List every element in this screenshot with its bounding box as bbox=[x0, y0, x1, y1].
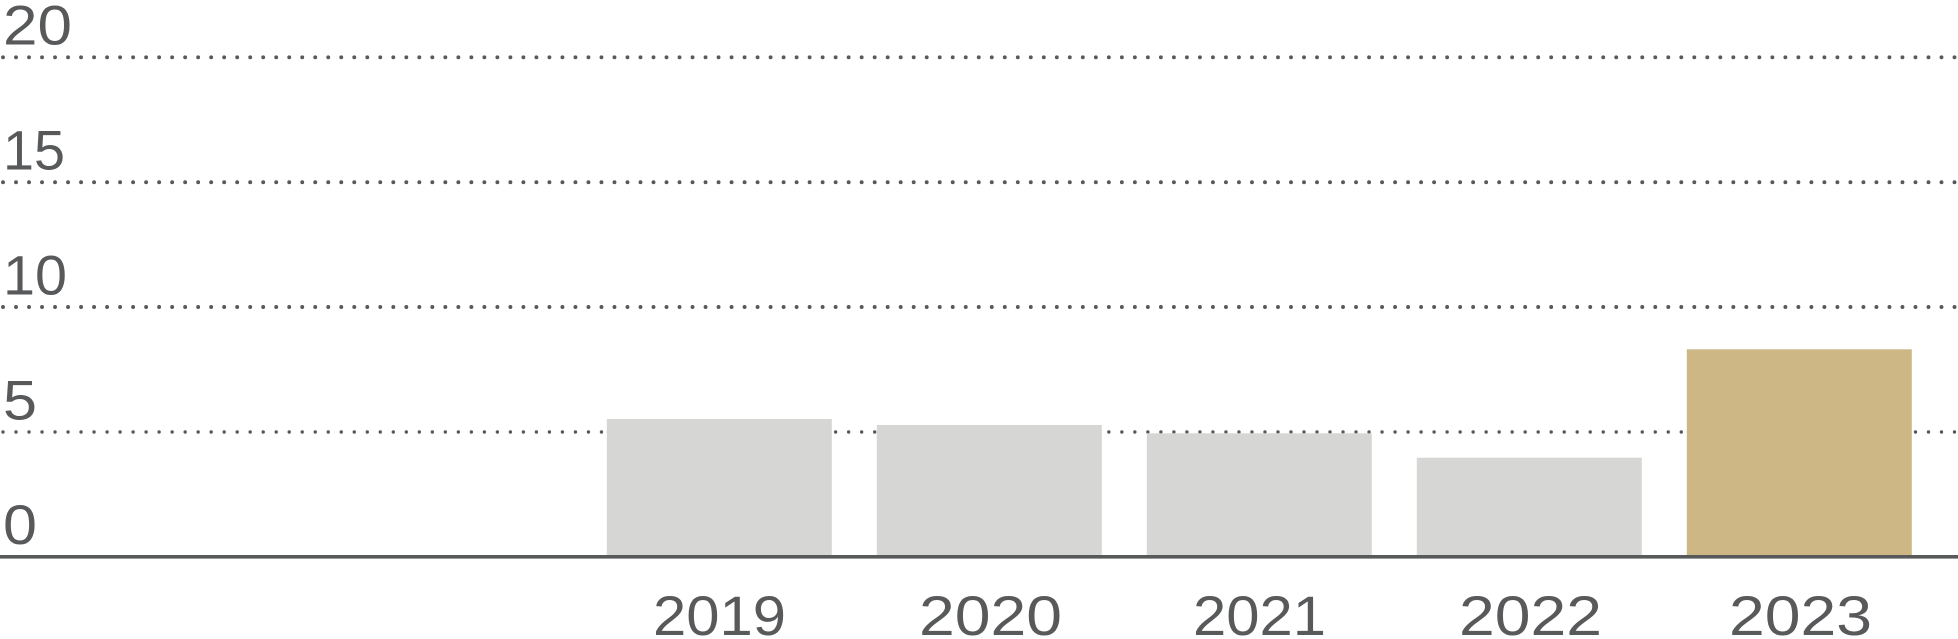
bar: 2021 bbox=[1147, 433, 1372, 557]
bar: 2020 bbox=[877, 425, 1102, 557]
y-axis labels: 5 bbox=[3, 368, 37, 432]
bar: 2022 bbox=[1417, 458, 1642, 557]
y-axis labels: 10 bbox=[3, 244, 67, 306]
bar: 2023 bbox=[1687, 349, 1912, 557]
x-axis labels bbox=[653, 584, 1872, 639]
y-axis labels: 0 bbox=[3, 493, 37, 556]
x-axis baseline bbox=[0, 555, 1958, 559]
y-axis labels: 15 bbox=[3, 118, 65, 182]
bar: 2019 bbox=[607, 419, 832, 557]
y-axis labels bbox=[3, 0, 72, 556]
